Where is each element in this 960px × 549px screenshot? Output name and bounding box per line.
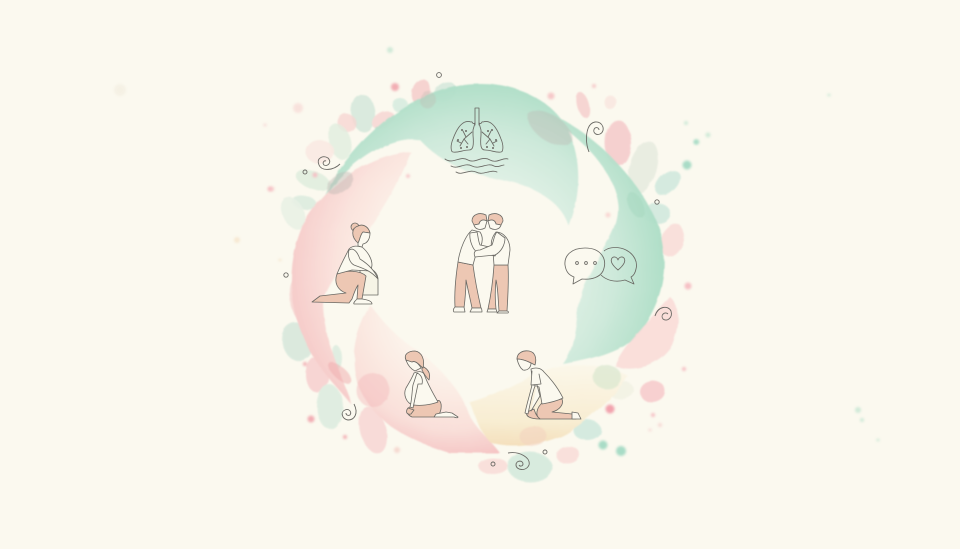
icon: speech bubbles with heart xyxy=(565,248,637,284)
swoosh: bottom right pink xyxy=(615,297,678,368)
figure: two people embracing xyxy=(453,214,510,313)
swoosh: right green xyxy=(535,108,664,364)
watercolour ring xyxy=(291,83,678,453)
swoosh: left pink xyxy=(291,152,411,405)
background splatter xyxy=(114,47,880,442)
paint droplets xyxy=(268,83,698,456)
swoosh: bottom pink xyxy=(354,306,500,453)
swoosh: top green xyxy=(325,83,578,226)
decorative spirals xyxy=(284,73,671,470)
decorative watercolour blobs behind ring xyxy=(274,77,688,482)
swoosh: bottom yellow xyxy=(470,365,628,446)
icon: lungs above water xyxy=(445,108,508,173)
figure: woman kneeling on one knee with cushion xyxy=(312,223,378,304)
figure: pregnant woman kneeling xyxy=(405,351,458,418)
figure: man kneeling and leaning forward xyxy=(517,351,581,419)
